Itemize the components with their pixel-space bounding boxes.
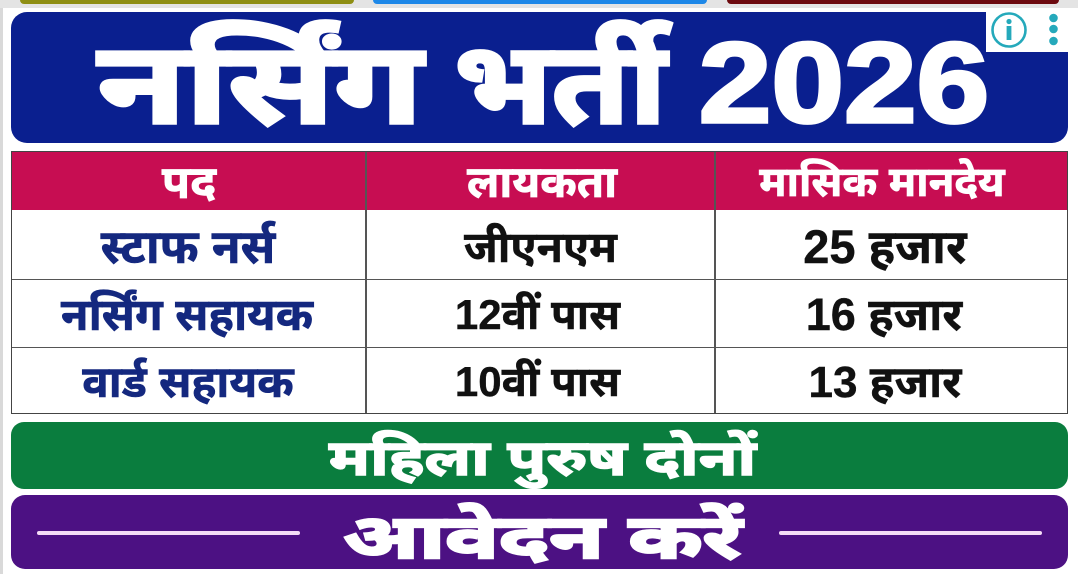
header: qualification: लायकता bbox=[467, 158, 617, 206]
title text: 2026 bbox=[699, 20, 989, 147]
left line bbox=[37, 531, 300, 535]
post: nursing assistant: नर्सिंग सहायक bbox=[61, 289, 313, 340]
title text: नर्सिंग bbox=[97, 21, 423, 148]
qualification: GNM: जीएनएम bbox=[464, 224, 617, 272]
table bbox=[11, 151, 1068, 414]
apply text: आवेदन करें bbox=[343, 502, 742, 570]
icon: vertical dots bbox=[1049, 14, 1058, 46]
title banner bbox=[11, 12, 1068, 143]
header: monthly honorarium: मासिक मानदेय bbox=[759, 158, 1005, 205]
purple banner bbox=[11, 495, 1068, 569]
info and menu icons bbox=[986, 11, 1068, 52]
row 1 bbox=[12, 210, 1067, 280]
row 2 bbox=[12, 280, 1067, 348]
qualification: 12th pass: 12वीं पास bbox=[455, 291, 620, 338]
right line bbox=[779, 531, 1042, 535]
olive banner fragment bbox=[20, 0, 354, 4]
icon: info circle bbox=[991, 12, 1027, 48]
post: ward assistant: वार्ड सहायक bbox=[82, 358, 294, 406]
pay: 13 thousand: 13 हजार bbox=[808, 358, 962, 406]
maroon banner fragment bbox=[727, 0, 1059, 4]
table header row bbox=[12, 152, 1067, 210]
top strip: cropped banners bbox=[0, 0, 1078, 8]
left edge strip bbox=[0, 0, 3, 574]
blue banner fragment bbox=[373, 0, 707, 4]
header: post: पद bbox=[162, 156, 216, 208]
qualification: 10th pass: 10वीं पास bbox=[455, 358, 620, 405]
title text: भर्ती bbox=[454, 21, 666, 148]
pay: 25 thousand: 25 हजार bbox=[803, 220, 967, 273]
green banner bbox=[11, 422, 1068, 489]
row 3 bbox=[82, 357, 962, 406]
pay: 16 thousand: 16 हजार bbox=[806, 289, 962, 340]
title text bbox=[95, 19, 989, 148]
green banner text: महिला पुरुष दोनों bbox=[329, 430, 756, 486]
post: staff nurse: स्टाफ नर्स bbox=[101, 220, 275, 273]
